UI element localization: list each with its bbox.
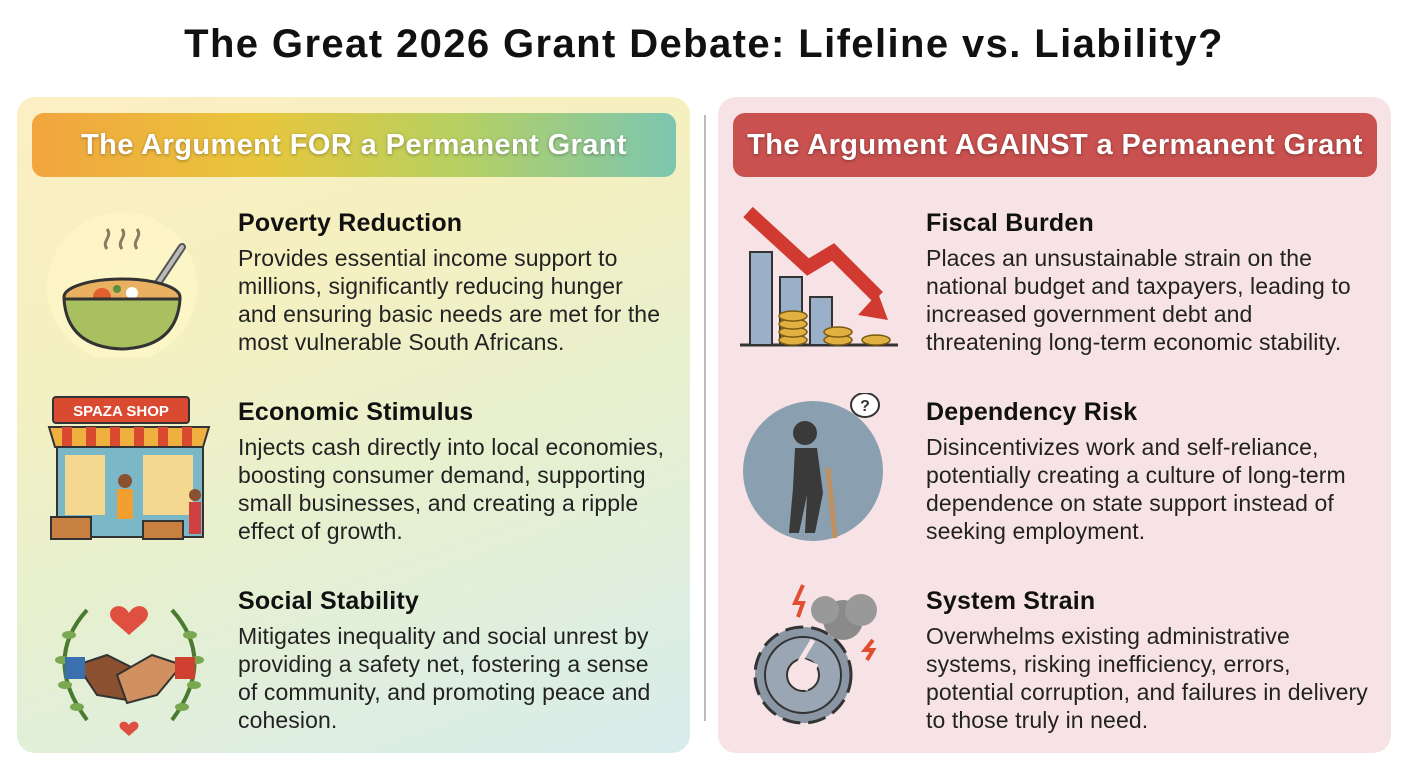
item: economic stimulus (238, 398, 664, 544)
item: fiscal burden: threatening long-term economic stability. (926, 329, 1341, 355)
icon: spaza shop: SPAZA SHOP (73, 403, 169, 420)
header: for (32, 113, 676, 177)
item: system strain (926, 587, 1368, 733)
item: economic stimulus: Injects cash directly into local economies, (238, 434, 664, 460)
icon: food bowl (62, 228, 186, 357)
item: social stability: Mitigates inequality and social unrest by (238, 623, 649, 649)
item: system strain: potential corruption, and failures in delivery (926, 679, 1368, 705)
item: dependency risk: Disincentivizes work and self-reliance, (926, 434, 1318, 460)
panel: for (17, 97, 690, 753)
icon: falling chart (740, 206, 898, 346)
item: system strain: to those truly in need. (926, 707, 1148, 733)
item: social stability: cohesion. (238, 707, 337, 733)
item: social stability: Social Stability (238, 587, 419, 615)
item: dependency risk: Dependency Risk (926, 398, 1137, 426)
item: dependency risk: potentially creating a culture of long-term (926, 462, 1346, 488)
item: social stability: of community, and promoting peace and (238, 679, 650, 705)
item: fiscal burden: increased government debt and (926, 301, 1252, 327)
icon: dependency person: ? (860, 398, 870, 415)
icon: spaza shop (48, 396, 210, 540)
title: The Great 2026 Grant Debate: Lifeline vs. Liability? (184, 22, 1224, 66)
item: social stability: providing a safety net, fostering a sense (238, 651, 649, 677)
item: poverty reduction: and ensuring basic needs are met for the (238, 301, 660, 327)
icon: dependency person (743, 393, 883, 541)
icon: broken gear (754, 584, 877, 724)
item: economic stimulus: effect of growth. (238, 518, 403, 544)
item: fiscal burden (926, 209, 1351, 355)
item: fiscal burden: national budget and taxpayers, leading to (926, 273, 1351, 299)
header: against (733, 113, 1377, 177)
icon: handshake wreath (55, 606, 204, 736)
item: social stability (238, 587, 650, 733)
item: dependency risk: dependence on state support instead of (926, 490, 1334, 516)
item: poverty reduction: most vulnerable South Africans. (238, 329, 565, 355)
item: system strain: systems, risking inefficiency, errors, (926, 651, 1291, 677)
item: dependency risk: seeking employment. (926, 518, 1145, 544)
item: economic stimulus: Economic Stimulus (238, 398, 473, 426)
divider (704, 115, 706, 721)
item: system strain: Overwhelms existing administrative (926, 623, 1290, 649)
item: poverty reduction: Provides essential income support to (238, 245, 617, 271)
item: economic stimulus: boosting consumer demand, supporting (238, 462, 646, 488)
header: for: The Argument FOR a Permanent Grant (81, 129, 627, 161)
item: poverty reduction (238, 209, 660, 355)
header: against: The Argument AGAINST a Permanent Grant (747, 129, 1363, 161)
item: dependency risk (926, 398, 1346, 544)
item: poverty reduction: Poverty Reduction (238, 209, 462, 237)
item: poverty reduction: millions, significantly reducing hunger (238, 273, 623, 299)
item: fiscal burden: Places an unsustainable strain on the (926, 245, 1312, 271)
item: fiscal burden: Fiscal Burden (926, 209, 1094, 237)
item: system strain: System Strain (926, 587, 1095, 615)
item: economic stimulus: small businesses, and creating a ripple (238, 490, 638, 516)
panel: against (718, 97, 1391, 753)
